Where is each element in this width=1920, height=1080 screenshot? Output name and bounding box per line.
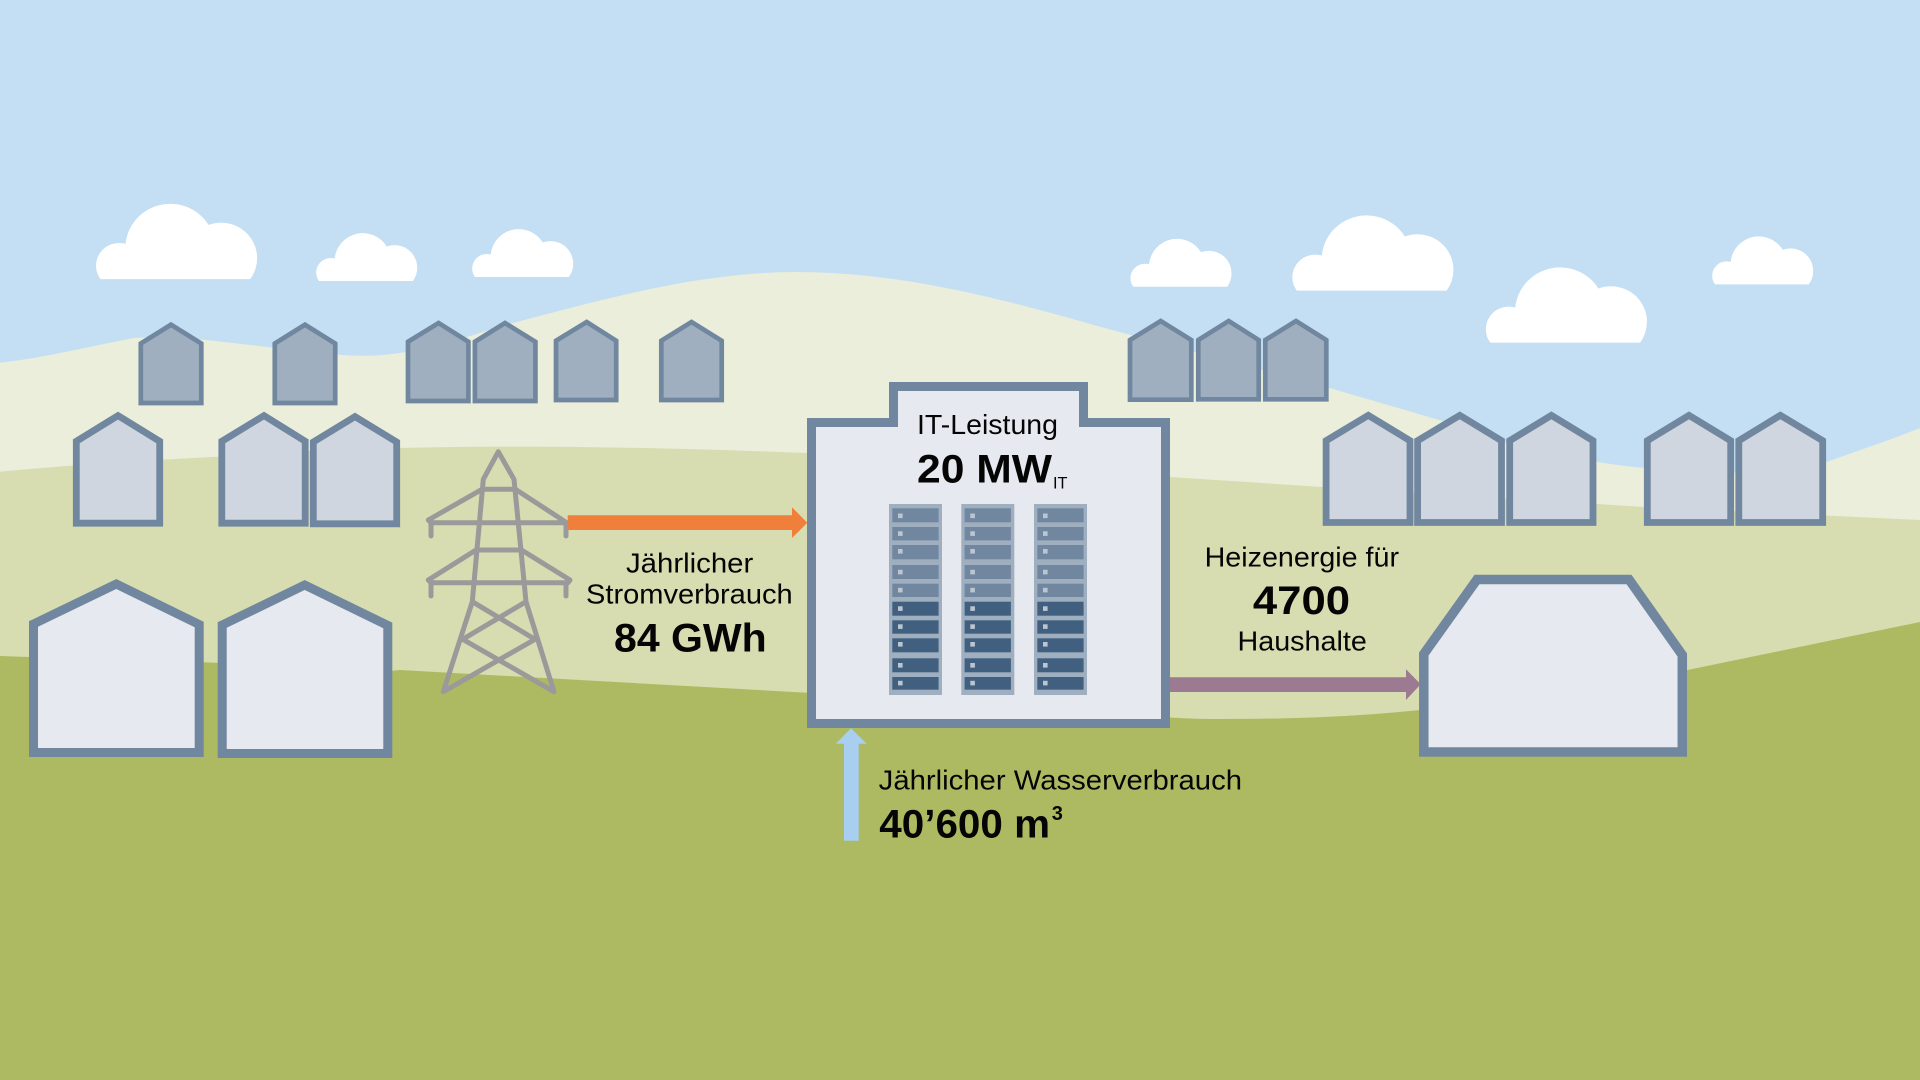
cloud 1 <box>96 204 257 279</box>
large houses left <box>34 584 388 754</box>
text: IT power: IT <box>1053 474 1068 493</box>
text: water consumption: 40’600 m <box>879 803 1050 847</box>
text: water consumption: Jährlicher Wasserverbrauch <box>879 764 1242 795</box>
clouds <box>96 204 1813 343</box>
server racks <box>889 504 1087 695</box>
text: IT power <box>917 409 1068 493</box>
text: electricity consumption: Stromverbrauch <box>586 578 793 609</box>
middle houses right <box>1326 415 1823 522</box>
cloud 4 <box>1131 239 1232 287</box>
heated building right <box>1424 580 1682 752</box>
cloud 5 <box>1292 215 1453 291</box>
text: heating energy: Haushalte <box>1238 626 1367 657</box>
cloud 2 <box>316 233 417 281</box>
front hill <box>0 622 1920 1080</box>
cloud 6 <box>1486 267 1647 343</box>
text: heating energy <box>1205 542 1399 657</box>
cloud 7 <box>1712 236 1813 284</box>
text: IT power: IT-Leistung <box>917 409 1058 440</box>
icon: electricity pylon <box>428 452 570 692</box>
distant houses left <box>141 322 722 403</box>
text: water consumption: 3 <box>1052 803 1063 825</box>
data centre building <box>812 386 1166 724</box>
distant houses right <box>1130 321 1326 400</box>
far hill <box>0 272 1920 1080</box>
text: electricity consumption: Jährlicher <box>626 548 753 579</box>
text: water consumption <box>879 764 1242 847</box>
text: heating energy: 4700 <box>1253 579 1350 623</box>
arrow: heat <box>1170 669 1421 700</box>
arrow: electricity <box>568 507 807 538</box>
middle houses left <box>76 416 397 524</box>
arrow: water <box>836 728 867 841</box>
middle hill <box>0 447 1920 1080</box>
cloud 3 <box>472 229 573 277</box>
text: heating energy: Heizenergie für <box>1205 542 1399 573</box>
text: IT power: 20 MW <box>917 448 1052 492</box>
text: electricity consumption: 84 GWh <box>614 617 767 661</box>
text: electricity consumption <box>586 548 793 661</box>
